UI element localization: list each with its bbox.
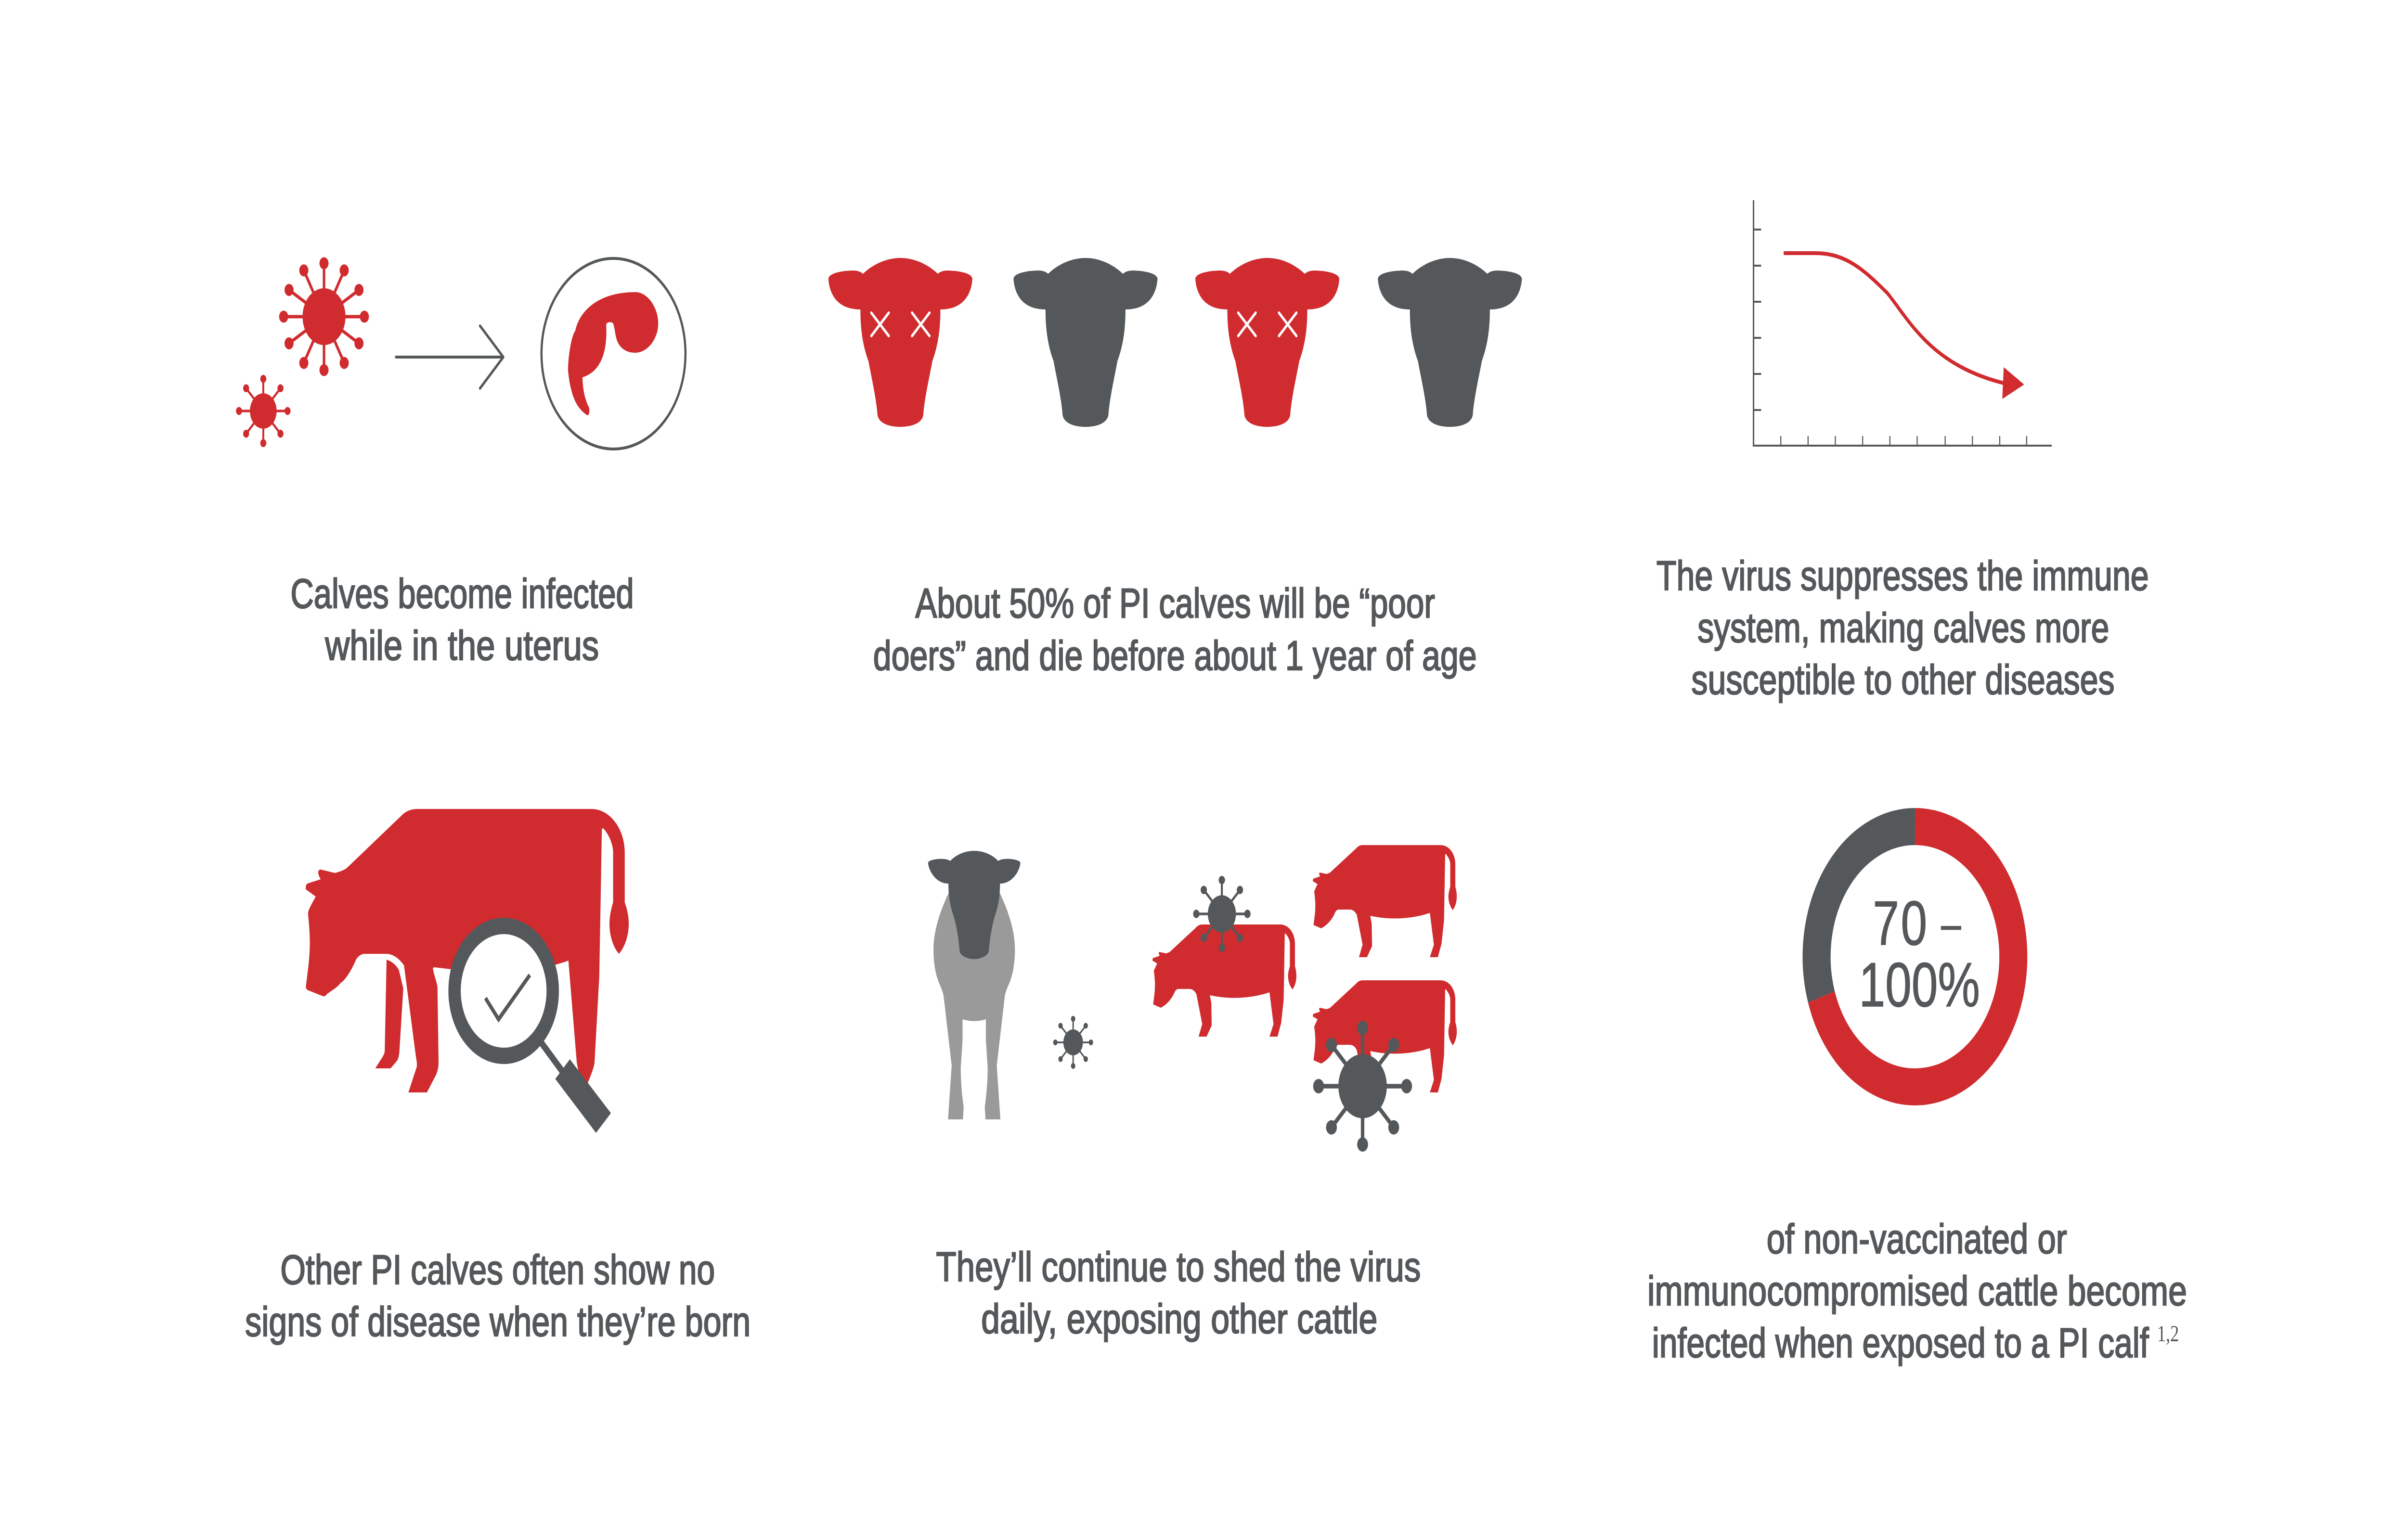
text: continue to shed: They’ll continue to shed the virus: [936, 1244, 1421, 1290]
chart: declining immune curve: [1754, 200, 2052, 446]
panel: 70 to 100 percent: [1647, 827, 2187, 1366]
text: about 50 percent: doers” and die before about 1 year of age: [873, 633, 1477, 679]
panel: poor doers: [828, 258, 1522, 679]
text: virus suppresses: The virus suppresses the immune: [1656, 553, 2149, 599]
icon: red cow: [306, 809, 629, 1092]
chart: donut: [1817, 827, 2013, 1087]
icon: magnifier with check mark: [454, 926, 611, 1133]
icon: grey calf head: [1378, 258, 1522, 427]
icon: large virus: [279, 257, 369, 376]
text: non-vaccinated: of non-vaccinated or: [1767, 1216, 2067, 1262]
arrow: [396, 326, 503, 388]
panel: shedding the virus: [928, 845, 1457, 1342]
icon: small grey virus: [1053, 1016, 1093, 1069]
icon: fetus in circle: [542, 258, 686, 449]
text: donut value: –: [1941, 898, 1961, 950]
icon: red cow bottom right: [1313, 980, 1457, 1092]
text: virus suppresses: system, making calves more: [1697, 605, 2109, 651]
text: virus suppresses: susceptible to other diseases: [1691, 657, 2115, 703]
panel: immune suppression: [1656, 200, 2149, 703]
text: footnote references: 1,2: [2157, 1321, 2179, 1347]
text: calves become infected: Calves become infected: [291, 571, 634, 617]
icon: red cow left: [1152, 924, 1296, 1037]
panel: infected in the uterus: [236, 257, 686, 669]
icon: red cow top right: [1313, 845, 1457, 957]
icon: small virus: [236, 375, 291, 447]
text: donut value: 70: [1873, 889, 1927, 958]
icon: front-facing calf: [928, 851, 1021, 1119]
text: donut value: 100%: [1859, 950, 1980, 1020]
text: non-vaccinated: infected when exposed to a PI calf: [1652, 1320, 2149, 1366]
text: continue to shed: daily, exposing other cattle: [981, 1296, 1377, 1342]
text: other PI calves: signs of disease when they’re born: [245, 1299, 751, 1345]
icon: red dead calf head: [828, 258, 972, 427]
text: calves become infected: while in the uterus: [324, 623, 599, 669]
panel: no signs of disease: [245, 809, 751, 1345]
icon: medium grey virus: [1193, 876, 1251, 952]
text: about 50 percent: About 50% of PI calves will be “poor: [915, 580, 1435, 627]
text: non-vaccinated: immunocompromised cattle become: [1647, 1268, 2187, 1314]
icon: red dead calf head: [1195, 258, 1339, 427]
icon: large grey virus: [1313, 1021, 1412, 1152]
text: other PI calves: Other PI calves often show no: [280, 1247, 715, 1293]
icon: grey calf head: [1013, 258, 1157, 427]
